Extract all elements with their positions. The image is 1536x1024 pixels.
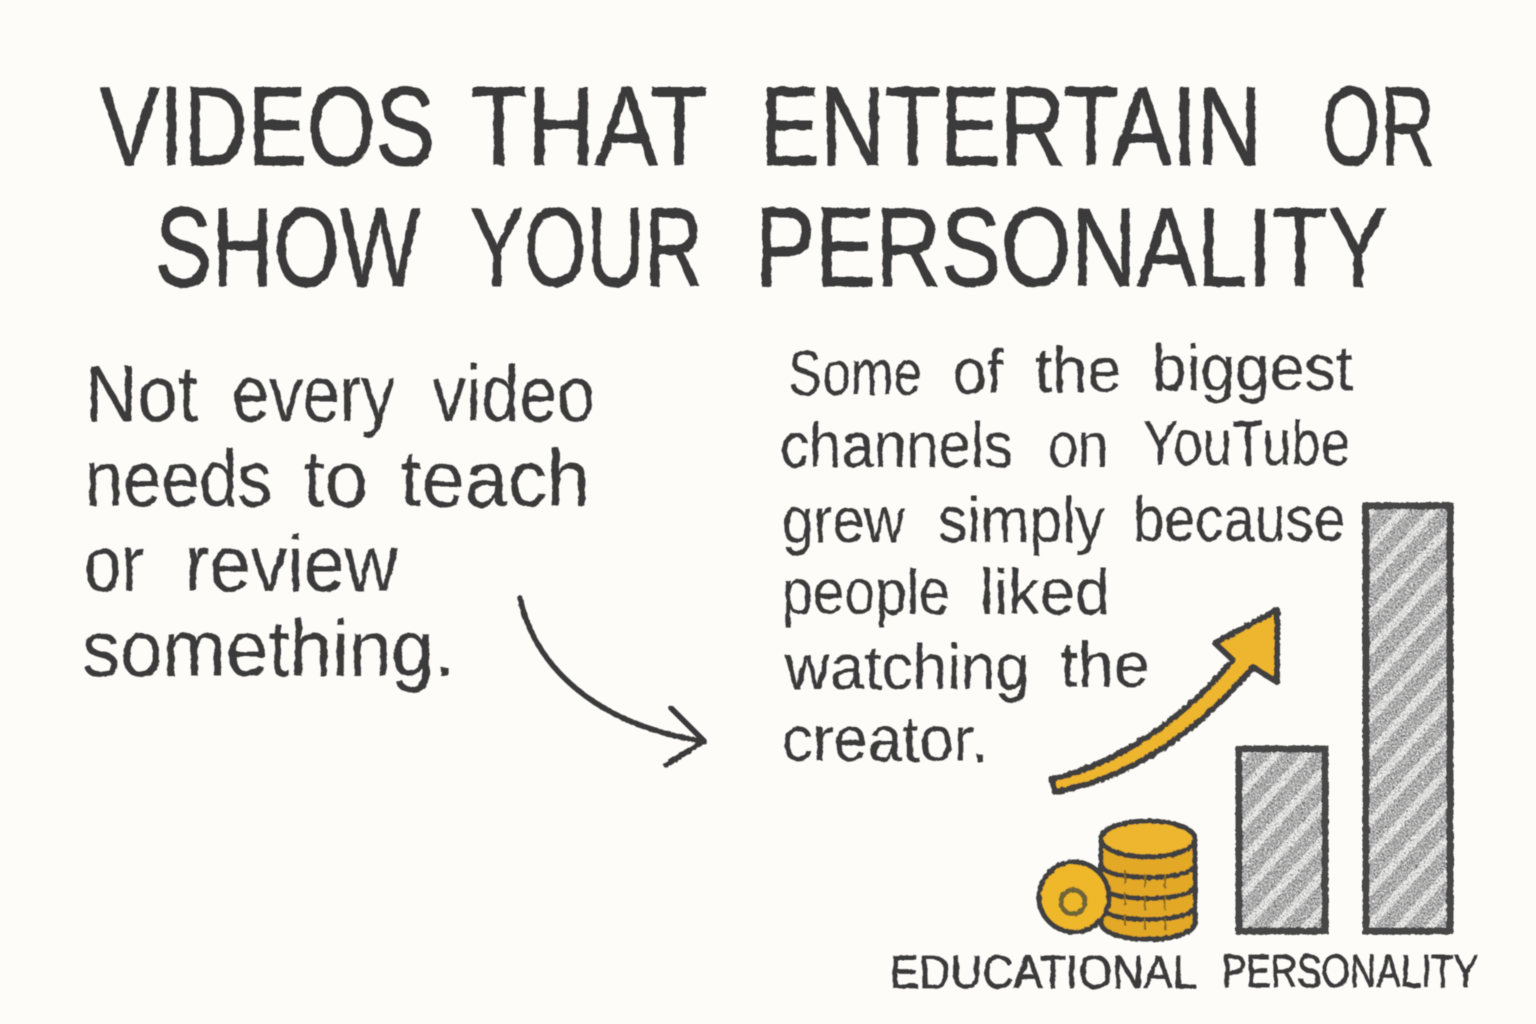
title: VIDEOS [100, 64, 435, 189]
left text block: review [185, 519, 398, 608]
left text block: needs [85, 434, 272, 523]
right text block: liked [980, 556, 1110, 628]
title: THAT [470, 64, 708, 189]
right text block: watching [784, 631, 1030, 703]
bar: personality [1366, 506, 1450, 931]
left text block: teach [400, 434, 590, 523]
right text block: people [782, 556, 950, 628]
bar labels [890, 945, 1478, 998]
left text block: every [232, 349, 395, 438]
growth arrow [1052, 610, 1277, 792]
title: PERSONALITY [755, 185, 1388, 310]
title: YOUR [470, 185, 703, 310]
bar: educational [1239, 749, 1325, 931]
left text block [82, 349, 595, 693]
curved arrow pointing right [520, 598, 704, 765]
right text block: Some [788, 337, 922, 409]
right text block: the [1035, 334, 1122, 406]
left text block: to [303, 434, 368, 523]
right text block: grew [782, 484, 906, 556]
left text block: video [432, 349, 595, 438]
title: OR [1322, 64, 1435, 189]
left text block: something. [82, 604, 455, 693]
coins [1039, 821, 1195, 939]
title: ENTERTAIN [760, 64, 1262, 189]
single coin [1039, 862, 1109, 932]
right text block: because [1133, 483, 1345, 555]
right text block: simply [938, 484, 1105, 556]
right text block: channels [780, 409, 1013, 481]
bar labels: PERSONALITY [1222, 945, 1478, 997]
right text block: on [1048, 409, 1108, 481]
right text block: of [953, 336, 1003, 408]
title [100, 64, 1435, 310]
right text block: the [1060, 629, 1150, 701]
right text block: creator. [782, 703, 988, 775]
coin stack [1101, 821, 1195, 939]
bar labels: EDUCATIONAL [890, 946, 1197, 998]
title: SHOW [155, 185, 420, 310]
right text block: biggest [1152, 332, 1353, 404]
right text block: YouTube [1143, 407, 1350, 479]
left text block: or [84, 519, 144, 608]
left text block: Not [85, 349, 198, 438]
right text block [780, 332, 1353, 775]
